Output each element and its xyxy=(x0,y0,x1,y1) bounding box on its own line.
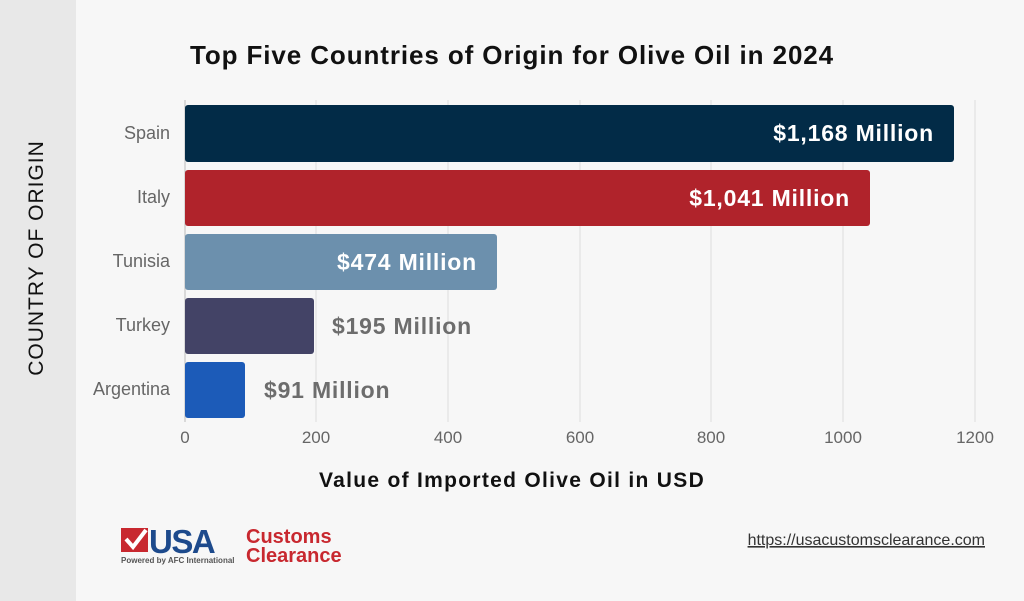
x axis ticks: 800 xyxy=(697,428,725,447)
logo: USA xyxy=(149,523,215,560)
category labels xyxy=(93,123,171,399)
bar: Spain: $1,168 Million xyxy=(773,120,934,146)
bar: Tunisia xyxy=(185,234,497,290)
title: Top Five Countries of Origin for Olive Oil in 2024 xyxy=(190,40,834,70)
category labels: Tunisia xyxy=(113,251,171,271)
x axis title: Value of Imported Olive Oil in USD xyxy=(319,469,705,492)
category labels: Turkey xyxy=(116,315,170,335)
bar: Spain xyxy=(185,105,954,162)
category labels: Spain xyxy=(124,123,170,143)
x axis ticks: 1200 xyxy=(956,428,994,447)
logo: Powered by AFC International xyxy=(121,556,234,565)
bar: Tunisia: $474 Million xyxy=(337,249,477,275)
bar: Italy xyxy=(185,170,870,226)
x axis ticks: 400 xyxy=(434,428,462,447)
bar: Argentina: $91 Million xyxy=(264,377,390,403)
y axis title: COUNTRY OF ORIGIN xyxy=(25,140,48,376)
bar: Argentina xyxy=(185,362,390,418)
x axis ticks: 1000 xyxy=(824,428,862,447)
logo xyxy=(121,523,342,567)
x axis ticks: 0 xyxy=(180,428,190,447)
bar chart xyxy=(185,105,954,418)
category labels: Italy xyxy=(137,187,170,207)
bar: Italy: $1,041 Million xyxy=(689,185,850,211)
x axis ticks: 200 xyxy=(302,428,330,447)
bar: Turkey xyxy=(185,298,472,354)
bar: Turkey: $195 Million xyxy=(332,313,472,339)
left side strip xyxy=(0,0,76,601)
category labels: Argentina xyxy=(93,379,171,399)
logo: Clearance xyxy=(246,545,342,567)
x axis ticks: 600 xyxy=(566,428,594,447)
logo: Customs xyxy=(246,526,332,548)
url: https://usacustomsclearance.com xyxy=(748,532,985,549)
x axis ticks xyxy=(180,428,994,447)
